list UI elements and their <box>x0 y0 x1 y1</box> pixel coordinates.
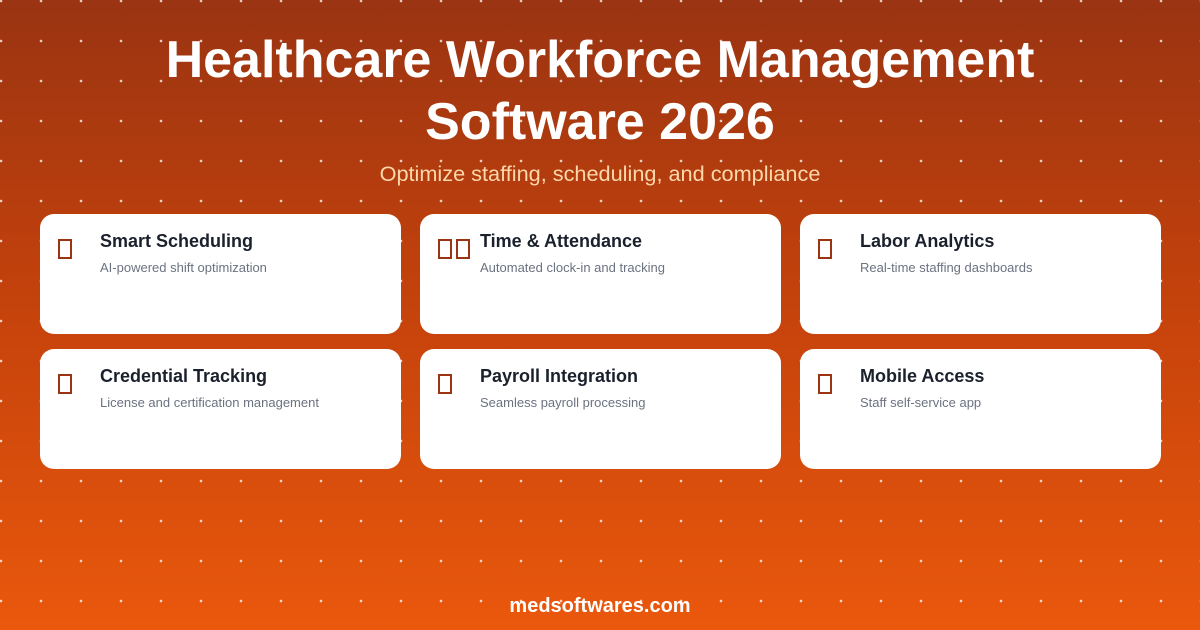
card title: Labor Analytics <box>860 231 994 251</box>
card title: Credential Tracking <box>100 366 267 386</box>
card description: Real-time staffing dashboards <box>860 260 1032 275</box>
card title: Payroll Integration <box>480 366 638 386</box>
footer url: medsoftwares.com <box>509 595 691 617</box>
card title: Mobile Access <box>860 366 984 386</box>
title: Software 2026 <box>425 93 775 151</box>
card description: Seamless payroll processing <box>480 395 645 410</box>
card description: AI-powered shift optimization <box>100 260 267 275</box>
icon: clock <box>438 239 470 259</box>
icon: scheduling <box>58 239 72 259</box>
icon: mobile <box>818 374 832 394</box>
card description: Staff self-service app <box>860 395 981 410</box>
card: labor analytics <box>800 214 1161 334</box>
icon: credential <box>58 374 72 394</box>
title: Healthcare Workforce Management <box>166 31 1034 89</box>
card: time & attendance <box>420 214 781 334</box>
card title: Time & Attendance <box>480 231 642 251</box>
card: smart scheduling <box>40 214 401 334</box>
icon: analytics <box>818 239 832 259</box>
card title: Smart Scheduling <box>100 231 253 251</box>
subtitle: Optimize staffing, scheduling, and compliance <box>380 161 820 186</box>
card description: Automated clock-in and tracking <box>480 260 665 275</box>
card description: License and certification management <box>100 395 319 410</box>
title <box>166 31 1034 151</box>
card: credential tracking <box>40 349 401 469</box>
card: mobile access <box>800 349 1161 469</box>
icon: payroll <box>438 374 452 394</box>
card: payroll integration <box>420 349 781 469</box>
